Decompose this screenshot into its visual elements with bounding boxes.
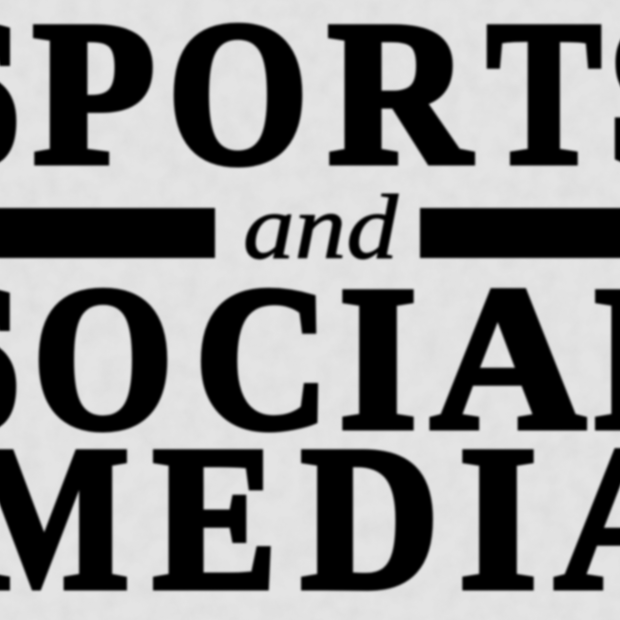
left divider bar [0, 208, 215, 258]
connecting word: and: and [243, 176, 399, 278]
heading word: SOCIAL [0, 245, 620, 472]
right divider bar [420, 208, 620, 258]
heading word: SOCIAL: I [339, 245, 417, 472]
heading word: SOCIAL: A [431, 245, 585, 472]
heading word: SOCIAL: C [195, 245, 329, 472]
heading word: SOCIAL: O [33, 245, 173, 472]
heading word: SPORTS [0, 0, 620, 207]
heading word: MEDIA [0, 405, 620, 620]
